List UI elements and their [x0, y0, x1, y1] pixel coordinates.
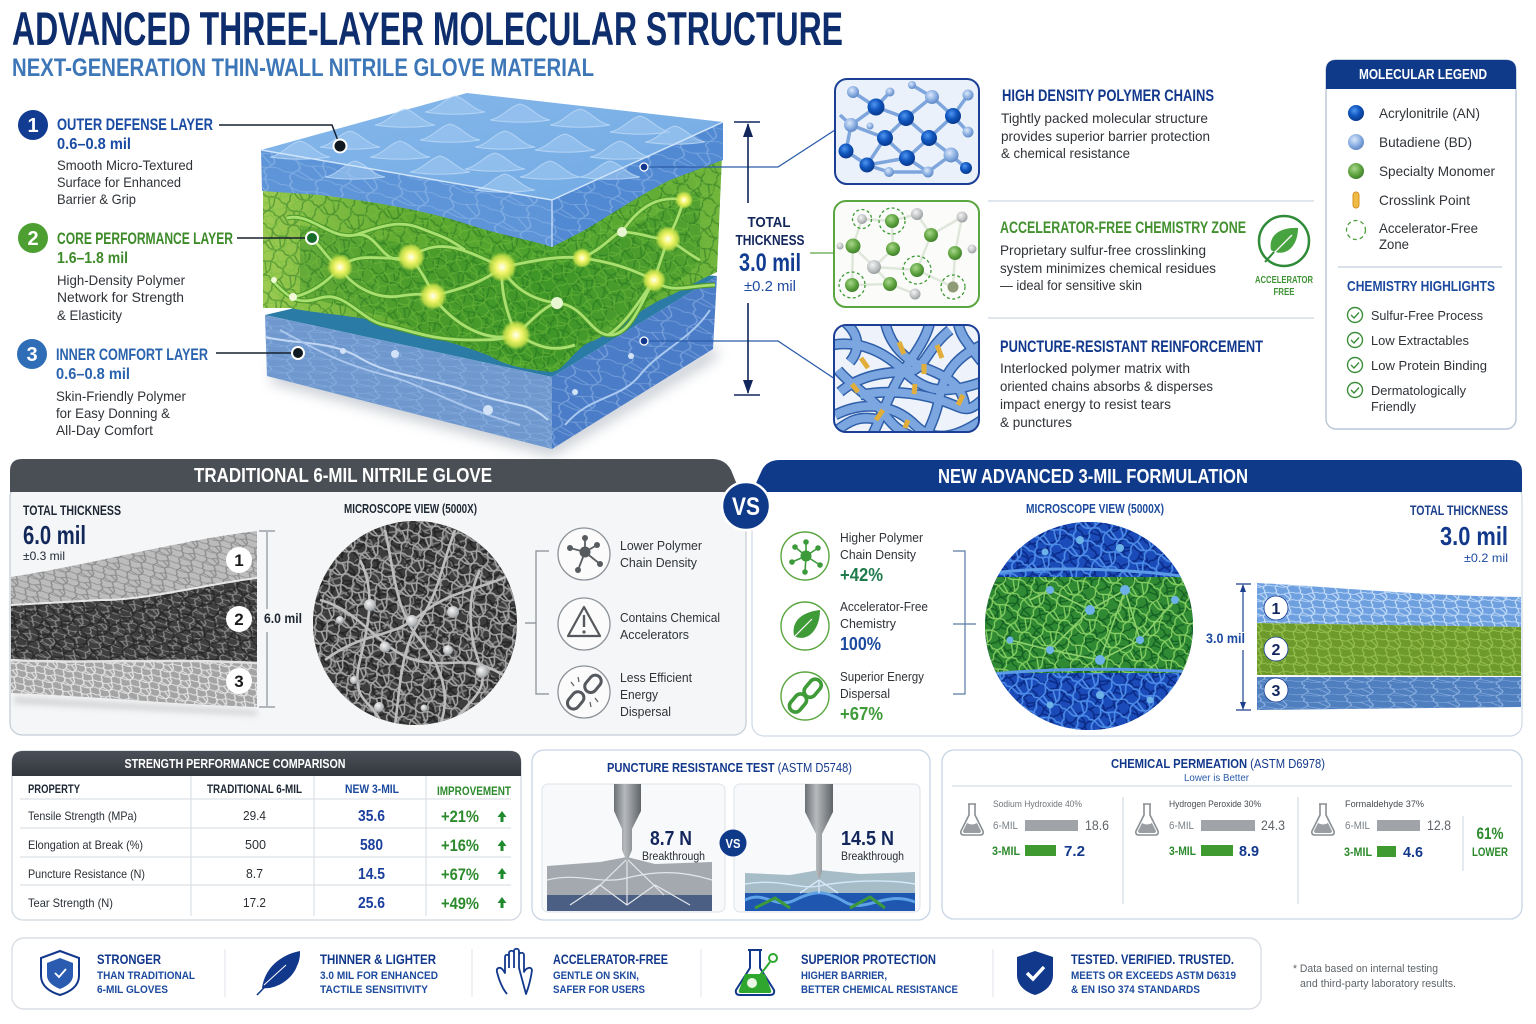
- needle: [805, 784, 833, 880]
- label: outer defense layer: OUTER DEFENSE LAYER: [57, 115, 213, 134]
- row: puncture resistance: Puncture Resistance (N): [28, 867, 145, 881]
- benefit: tested: TESTED. VERIFIED. TRUSTED.: [1071, 951, 1234, 967]
- panel: puncture resistance test: [532, 750, 930, 920]
- text: accelerator-free chemistry: 100%: [840, 634, 881, 654]
- chemical: sodium hydroxide: Sodium Hydroxide 40%: [993, 799, 1082, 809]
- needle: [614, 784, 641, 862]
- callout text: polymer chains: Tightly packed molecular structure: [1001, 110, 1208, 126]
- card: new puncture: Breakthrough: [841, 851, 904, 863]
- chemical: sodium hydroxide: 6-MIL: [993, 820, 1018, 832]
- connector lines to callouts: [640, 130, 835, 379]
- label: inner comfort layer: All-Day Comfort: [56, 422, 153, 438]
- label: core performance layer: High-Density Polymer: [57, 272, 185, 288]
- chemical: sodium hydroxide: [961, 799, 1109, 860]
- row: puncture resistance: 8.7: [246, 866, 263, 881]
- total thickness: 6 mil: 6.0 mil: [23, 520, 86, 550]
- label: core performance layer: 1.6–1.8 mil: [57, 250, 128, 267]
- chemical: formaldehyde: 6-MIL: [1345, 820, 1370, 832]
- title: ADVANCED THREE-LAYER MOLECULAR STRUCTURE: [12, 2, 843, 55]
- VS badge: VS: [732, 493, 760, 521]
- dimension: 6.0 mil: 6.0 mil: [264, 610, 302, 626]
- footnote: * Data based on internal testing: [1293, 963, 1438, 975]
- label: outer defense layer: 0.6–0.8 mil: [57, 136, 131, 153]
- icon: accelerator free badge: ACCELERATOR: [1255, 275, 1314, 286]
- leader dots on block: [216, 125, 346, 359]
- card: traditional puncture: Breakthrough: [642, 851, 705, 863]
- benefit: accelerator-free: [553, 951, 668, 996]
- callout text: puncture-resistant: oriented chains absorbs & disperses: [1000, 378, 1213, 394]
- dimension: 6.0 mil: [259, 531, 302, 707]
- label: inner comfort layer: 3: [26, 344, 38, 366]
- row: tear strength: Tear Strength (N): [28, 896, 113, 910]
- text: lower polymer density: Lower Polymer: [620, 538, 703, 553]
- text: lower polymer density: Chain Density: [620, 555, 697, 570]
- total thickness: 3 mil: TOTAL THICKNESS: [1410, 503, 1508, 518]
- callout text: puncture-resistant: PUNCTURE-RESISTANT REINFORCEMENT: [1000, 337, 1263, 356]
- callout text: puncture-resistant: & punctures: [1000, 414, 1072, 430]
- benefit: thinner: THINNER & LIGHTER: [320, 951, 436, 967]
- row: puncture resistance: +67%: [441, 865, 479, 884]
- callout text: accelerator-free: — ideal for sensitive skin: [1000, 277, 1142, 293]
- benefit: tested: & EN ISO 374 STANDARDS: [1071, 984, 1200, 996]
- total thickness dimension: TOTAL: [748, 214, 790, 231]
- column headings: NEW 3-MIL: [345, 782, 399, 796]
- total thickness dimension: 3.0 mil: [739, 249, 801, 277]
- footnote: and third-party laboratory results.: [1300, 978, 1456, 990]
- panel: puncture-resistant reinforcement: [832, 322, 1263, 440]
- label: outer defense layer: 1: [27, 115, 39, 137]
- cross-section: new: 1: [1272, 601, 1281, 618]
- label: outer defense layer: Surface for Enhanced: [57, 174, 181, 190]
- text: energy dispersal: Dispersal: [840, 686, 890, 701]
- chemical: hydrogen peroxide: 8.9: [1239, 843, 1259, 860]
- row: tear strength: [28, 894, 506, 913]
- benefit: thinner: [320, 951, 438, 996]
- chemical heading: Lower is Better: [1184, 773, 1250, 784]
- icon: shield outline: [41, 951, 79, 995]
- row: elongation: 580: [360, 837, 383, 854]
- text: accelerator-free chemistry: [840, 599, 928, 654]
- panel: molecular legend: MOLECULAR LEGEND: [1359, 66, 1487, 83]
- legend items: Butadiene (BD): [1379, 134, 1472, 150]
- icon: warning: [558, 598, 610, 650]
- total thickness: 6 mil: TOTAL THICKNESS: [23, 503, 121, 518]
- callout text: puncture-resistant: [1000, 337, 1263, 430]
- callout text: accelerator-free: system minimizes chemical residues: [1000, 260, 1216, 276]
- icon: chain: [781, 672, 829, 720]
- text: accelerator-free chemistry: Accelerator-Free: [840, 599, 928, 614]
- cross-section: new: [1257, 583, 1521, 710]
- icon: feather: [257, 951, 300, 995]
- microscope view: new: MICROSCOPE VIEW (5000X): [1026, 502, 1164, 516]
- cross-section: traditional: [11, 531, 257, 716]
- row: puncture resistance: 14.5: [358, 866, 385, 883]
- label: core performance layer: CORE PERFORMANCE LAYER: [57, 229, 233, 248]
- text: less efficient dispersal: Less Efficient: [620, 670, 692, 685]
- chemical: hydrogen peroxide: 6-MIL: [1169, 820, 1194, 832]
- header: new: NEW ADVANCED 3-MIL FORMULATION: [938, 466, 1248, 488]
- cross-section: traditional: 1: [234, 551, 244, 570]
- callout text: polymer chains: HIGH DENSITY POLYMER CHAINS: [1002, 86, 1214, 105]
- benefit: superior protection: [801, 951, 958, 996]
- text: energy dispersal: [840, 669, 924, 724]
- card: traditional puncture: [542, 784, 725, 912]
- total thickness: 3 mil: [1410, 503, 1508, 565]
- molecule illustration: accelerator-free: [834, 201, 979, 307]
- callout text: polymer chains: [1001, 86, 1214, 161]
- row: elongation: Elongation at Break (%): [28, 838, 143, 852]
- glowing crosslink nodes: [271, 191, 693, 350]
- icon: lower polymer density: [558, 528, 610, 580]
- bottom blue layer: [265, 260, 717, 449]
- label: core performance layer: & Elasticity: [57, 307, 122, 323]
- chemical: formaldehyde: [1312, 799, 1451, 861]
- cross-section: new: 3: [1272, 683, 1281, 700]
- row: tensile strength: 29.4: [243, 808, 266, 823]
- panel: traditional 6-mil glove: [10, 459, 746, 735]
- chemistry highlights: CHEMISTRY HIGHLIGHTS: [1347, 278, 1495, 295]
- benefit: stronger: 6-MIL GLOVES: [97, 984, 168, 996]
- legend items: [1346, 105, 1495, 252]
- icon: accelerator free badge: [1255, 216, 1314, 298]
- chemistry highlights: Friendly: [1371, 399, 1416, 414]
- text: contains accelerators: [620, 610, 720, 642]
- row: tensile strength: [28, 807, 506, 826]
- total thickness dimension: [734, 122, 804, 395]
- total thickness: 6 mil: ±0.3 mil: [23, 549, 65, 563]
- column headings: [28, 782, 512, 798]
- total thickness: 6 mil: [23, 503, 121, 563]
- label: inner comfort layer: [17, 339, 208, 438]
- chemical: formaldehyde: 3-MIL: [1344, 845, 1372, 859]
- layer labels: [17, 110, 233, 438]
- molecule illustration: dense: [835, 79, 979, 184]
- 61% lower callout: LOWER: [1472, 845, 1508, 859]
- dimension: 3.0 mil: 3.0 mil: [1206, 630, 1245, 646]
- row: tensile strength: 35.6: [358, 808, 385, 825]
- VS badge: [722, 482, 770, 530]
- row: tear strength: 17.2: [243, 895, 266, 910]
- legend items: Crosslink Point: [1379, 192, 1470, 208]
- microscope view: new: [985, 502, 1195, 732]
- benefit: tested: [1071, 951, 1236, 996]
- benefit: thinner: TACTILE SENSITIVITY: [320, 984, 429, 996]
- card: new puncture: 14.5 N: [841, 828, 894, 850]
- green core layer: [263, 155, 722, 372]
- benefit: stronger: THAN TRADITIONAL: [97, 970, 195, 982]
- chemical heading: [1111, 756, 1325, 784]
- panel: new advanced 3-mil: [752, 460, 1522, 736]
- chemical: hydrogen peroxide: 3-MIL: [1169, 844, 1196, 858]
- header: new: [752, 460, 1522, 492]
- callout text: polymer chains: provides superior barrier protection: [1001, 128, 1210, 144]
- panel: high density polymer chains: [835, 79, 1214, 184]
- 61% lower callout: [1472, 824, 1508, 859]
- VS badge small: VS: [726, 836, 741, 851]
- total thickness dimension: ±0.2 mil: [744, 278, 796, 295]
- label: outer defense layer: [18, 110, 213, 207]
- text: contains accelerators: Accelerators: [620, 627, 689, 642]
- chemical: hydrogen peroxide: 24.3: [1261, 817, 1285, 833]
- card: new puncture: [734, 784, 920, 912]
- callout text: puncture-resistant: impact energy to resist tears: [1000, 396, 1171, 412]
- total thickness: 3 mil: ±0.2 mil: [1464, 551, 1508, 565]
- text: less efficient dispersal: Energy: [620, 687, 658, 702]
- text: lower polymer density: [620, 538, 703, 570]
- column headings: PROPERTY: [28, 782, 80, 796]
- benefit: superior protection: HIGHER BARRIER,: [801, 970, 887, 982]
- label: inner comfort layer: 0.6–0.8 mil: [56, 366, 130, 383]
- row: elongation: +16%: [441, 836, 479, 855]
- legend items: Zone: [1379, 236, 1409, 252]
- benefit: stronger: [97, 951, 195, 996]
- label: inner comfort layer: for Easy Donning &: [56, 405, 171, 421]
- label: core performance layer: [18, 223, 233, 323]
- benefit: stronger: STRONGER: [97, 951, 161, 967]
- chemical: formaldehyde: Formaldehyde 37%: [1345, 799, 1424, 809]
- panel: chemical permeation: [942, 750, 1522, 919]
- chemical: sodium hydroxide: 7.2: [1064, 843, 1085, 860]
- cross-section: new: 2: [1272, 642, 1281, 659]
- legend items: Acrylonitrile (AN): [1379, 105, 1480, 121]
- text: less efficient dispersal: [620, 670, 692, 719]
- label: core performance layer: Network for Strength: [57, 289, 184, 305]
- callout text: accelerator-free: [1000, 218, 1246, 293]
- dimension: 3.0 mil: [1206, 584, 1251, 710]
- VS badge small: [720, 830, 746, 856]
- text: contains accelerators: Contains Chemical: [620, 610, 720, 625]
- callout text: accelerator-free: ACCELERATOR-FREE CHEMISTRY ZONE: [1000, 218, 1246, 237]
- chemical: formaldehyde: 12.8: [1427, 817, 1451, 833]
- total thickness: 3 mil: 3.0 mil: [1440, 521, 1508, 551]
- panel: accelerator-free chemistry zone: [834, 201, 1314, 307]
- legend items: Accelerator-Free: [1379, 220, 1478, 236]
- microscope view: traditional: MICROSCOPE VIEW (5000X): [344, 502, 477, 516]
- text: less efficient dispersal: Dispersal: [620, 704, 671, 719]
- chemical: hydrogen peroxide: Hydrogen Peroxide 30%: [1169, 799, 1261, 809]
- benefit: accelerator-free: ACCELERATOR-FREE: [553, 951, 668, 967]
- chemical: sodium hydroxide: 3-MIL: [992, 844, 1020, 858]
- 61% lower callout: 61%: [1476, 824, 1504, 843]
- chemical: sodium hydroxide: 18.6: [1085, 817, 1109, 833]
- benefit: thinner: 3.0 MIL FOR ENHANCED: [320, 970, 438, 982]
- label: core performance layer: 2: [27, 228, 39, 250]
- card: traditional puncture: 8.7 N: [650, 828, 692, 850]
- cross-section: traditional: 2: [234, 610, 244, 629]
- chemical: hydrogen peroxide: [1136, 799, 1285, 860]
- icon: broken chain: [558, 666, 610, 718]
- table header: [12, 751, 521, 776]
- header: traditional: [10, 459, 740, 492]
- callout text: polymer chains: & chemical resistance: [1001, 145, 1130, 161]
- chemical heading: CHEMICAL PERMEATION (ASTM D6978): [1111, 756, 1325, 771]
- label: outer defense layer: Barrier & Grip: [57, 191, 136, 207]
- label: inner comfort layer: INNER COMFORT LAYER: [56, 345, 208, 364]
- text: higher density: +42%: [840, 565, 883, 585]
- text: accelerator-free chemistry: Chemistry: [840, 616, 896, 631]
- chemistry highlights: [1347, 278, 1495, 414]
- microscope view: traditional: [310, 502, 520, 728]
- footnote: [1293, 963, 1456, 990]
- text: higher density: [840, 530, 924, 585]
- benefit: accelerator-free: SAFER FOR USERS: [553, 984, 645, 996]
- icon: hand: [497, 949, 532, 994]
- text: higher density: Higher Polymer: [840, 530, 924, 545]
- top blue layer: [261, 93, 723, 247]
- text: higher density: Chain Density: [840, 547, 916, 562]
- chemistry highlights: Low Protein Binding: [1371, 358, 1487, 373]
- chemistry highlights: Dermatologically: [1371, 383, 1466, 398]
- benefit: superior protection: BETTER CHEMICAL RESISTANCE: [801, 984, 958, 996]
- header: traditional: TRADITIONAL 6-MIL NITRILE GLOVE: [194, 465, 492, 487]
- text: energy dispersal: +67%: [840, 704, 883, 724]
- 3D layered material block: [216, 93, 723, 455]
- row: tear strength: 25.6: [358, 895, 385, 912]
- label: inner comfort layer: Skin-Friendly Polymer: [56, 388, 186, 404]
- molecule illustration: interlocked chains: [832, 322, 982, 440]
- row: puncture resistance: [28, 865, 506, 884]
- puncture heading: PUNCTURE RESISTANCE TEST (ASTM D5748): [607, 760, 852, 775]
- benefit: superior protection: SUPERIOR PROTECTION: [801, 951, 936, 967]
- benefit: tested: MEETS OR EXCEEDS ASTM D6319: [1071, 970, 1236, 982]
- text: energy dispersal: Superior Energy: [840, 669, 924, 684]
- callout text: accelerator-free: Proprietary sulfur-free crosslinking: [1000, 242, 1206, 258]
- panel: strength performance table: [12, 751, 521, 920]
- icon: green flask: [736, 950, 777, 995]
- panel: molecular legend: [1326, 60, 1516, 429]
- callout text: puncture-resistant: Interlocked polymer matrix with: [1000, 360, 1190, 376]
- row: tensile strength: Tensile Strength (MPa): [28, 809, 137, 823]
- subtitle: NEXT-GENERATION THIN-WALL NITRILE GLOVE MATERIAL: [12, 54, 594, 82]
- panel: benefits footer: [12, 938, 1261, 1009]
- column headings: TRADITIONAL 6-MIL: [207, 782, 302, 796]
- label: outer defense layer: Smooth Micro-Textured: [57, 157, 193, 173]
- legend items: Specialty Monomer: [1379, 163, 1495, 179]
- total thickness dimension: THICKNESS: [736, 232, 804, 249]
- table header: STRENGTH PERFORMANCE COMPARISON: [124, 756, 346, 771]
- chemistry highlights: Sulfur-Free Process: [1371, 308, 1483, 323]
- row: tensile strength: +21%: [441, 807, 479, 826]
- icon: check shield: [1017, 951, 1053, 995]
- row: elongation: [28, 836, 506, 855]
- column headings: IMPROVEMENT: [437, 784, 512, 798]
- icon: higher density: [781, 532, 829, 580]
- chemical: formaldehyde: 4.6: [1403, 844, 1423, 861]
- icon: accelerator free badge: FREE: [1274, 287, 1295, 298]
- chemistry highlights: Low Extractables: [1371, 333, 1469, 348]
- row: tear strength: +49%: [441, 894, 479, 913]
- row: elongation: 500: [245, 837, 266, 852]
- icon: leaf: [781, 602, 829, 650]
- cross-section: traditional: 3: [234, 672, 244, 691]
- benefit: accelerator-free: GENTLE ON SKIN,: [553, 970, 639, 982]
